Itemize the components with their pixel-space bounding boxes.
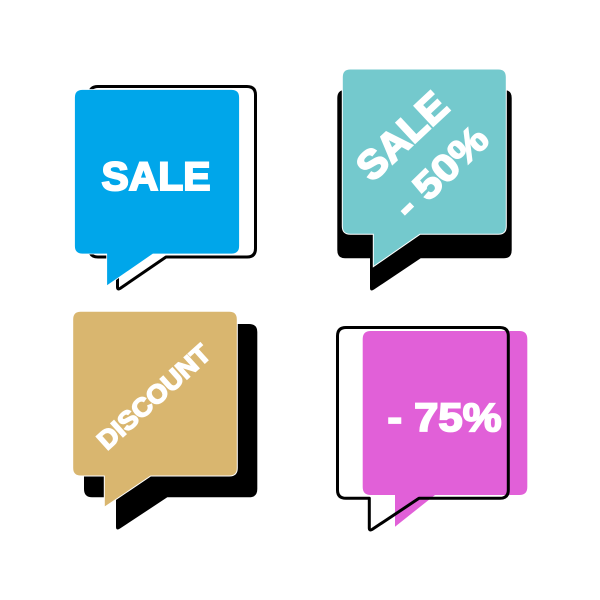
- panel: blue SALE bubble: [74, 86, 256, 289]
- teal bubble: [342, 69, 506, 267]
- tan bubble: [73, 311, 237, 507]
- pink bubble: [363, 331, 527, 527]
- label: SALE rotated: SALE: [348, 84, 457, 190]
- label: DISCOUNT rotated: DISCOUNT: [91, 338, 217, 455]
- bubble outline overlay: [338, 328, 508, 530]
- panel: tan DISCOUNT bubble: [73, 311, 257, 529]
- black shadow bubble: [337, 90, 512, 290]
- black shadow bubble: [84, 324, 257, 529]
- bubble outline offset: [90, 86, 256, 289]
- label: SALE: SALE: [102, 155, 210, 199]
- panel: teal SALE -50% bubble: [337, 69, 512, 290]
- label: -75%: - 75%: [388, 396, 502, 440]
- panel: pink -75% bubble: [338, 328, 527, 530]
- blue bubble: [74, 90, 240, 286]
- label: -50% rotated: - 50%: [386, 118, 497, 227]
